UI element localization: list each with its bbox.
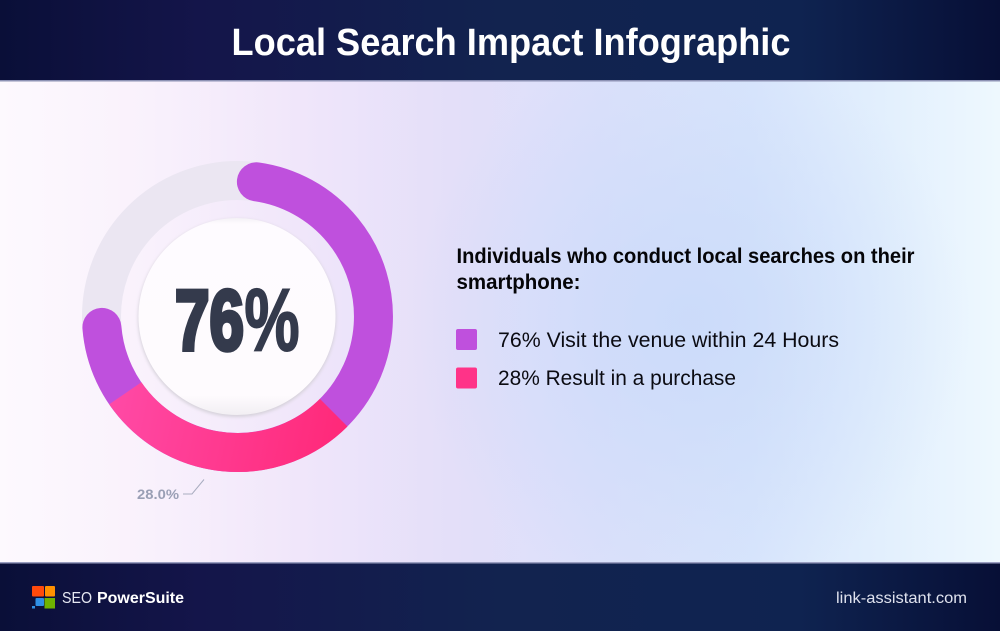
center disc: [138, 218, 336, 417]
donut track: [102, 180, 374, 452]
data label: 28.0%: 28.0%: [137, 486, 180, 502]
center value: 76: [175, 274, 244, 368]
title: Local Search Impact Infographic: [232, 22, 790, 64]
pink segment: 28%: [125, 393, 334, 453]
donut chart: [102, 180, 374, 502]
header bar: [0, 0, 1000, 82]
website url: link-assistant.com: [836, 590, 967, 607]
leader line: [183, 480, 204, 494]
logo wordmark: PowerSuite: [97, 590, 184, 607]
center value: %: [244, 270, 300, 370]
purple segment: 76%: [102, 182, 373, 452]
background panel: [0, 81, 1000, 563]
data label: 28.0%: [137, 480, 204, 502]
footer bar: [0, 562, 1000, 631]
heading: Individuals who conduct local searches on their: [456, 245, 914, 268]
legend item: 28%: 28% Result in a purchase: [498, 367, 736, 390]
legend item: 76%: 76% Visit the venue within 24 Hours: [498, 329, 839, 352]
icon: SEO PowerSuite logo: [32, 586, 55, 608]
text block: description and legend: [456, 245, 920, 390]
heading: smartphone:: [456, 271, 580, 294]
logo wordmark: SEO: [62, 590, 92, 607]
